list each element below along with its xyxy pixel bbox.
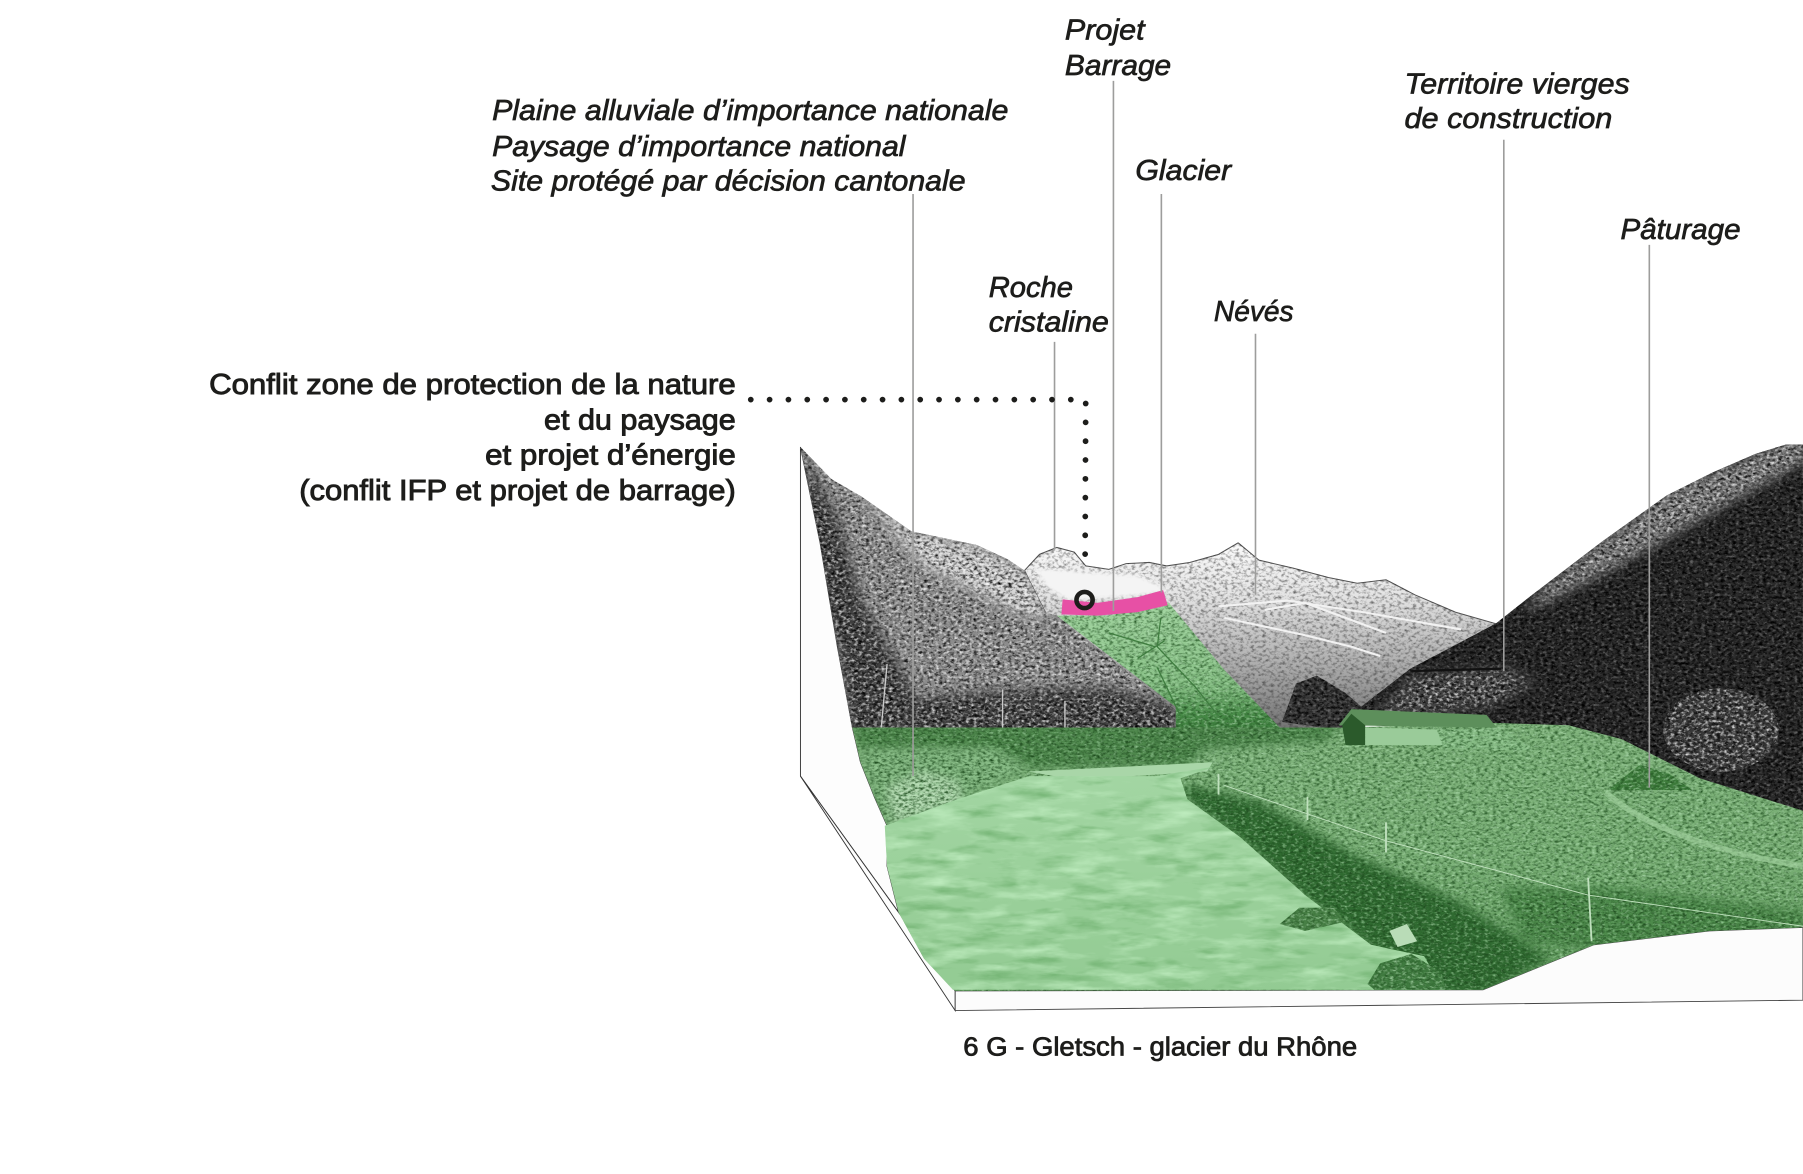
bushes foreground: [1663, 688, 1779, 772]
forested slope: [803, 456, 930, 739]
infographic: Gletsch landscape section: [210, 18, 1803, 1062]
conflict point marker: [1076, 592, 1093, 608]
label: Roche cristaline: Roche: [989, 272, 1073, 304]
grey upper ridge: [1525, 439, 1803, 612]
boulders on left bank: [887, 772, 961, 822]
label: conflict statement: (conflit IFP et projet de barrage): [299, 475, 736, 507]
fence: [1219, 774, 1803, 941]
label: protection zones: Plaine alluviale d’importance nationale: [492, 95, 1008, 127]
label: Territoire vierges de construction: de construction: [1404, 103, 1612, 135]
label: conflict statement: Conflit zone de protection de la nature: [209, 369, 736, 401]
white boulder: [1389, 924, 1417, 947]
leader: Roche cristaline: [1054, 342, 1056, 550]
label: protection zones: Site protégé par décision cantonale: [491, 166, 966, 198]
label: conflict statement: et projet d’énergie: [485, 439, 736, 471]
barn: [1339, 709, 1534, 751]
label: conflict statement: et du paysage: [544, 405, 736, 437]
label: Névés: Névés: [1214, 296, 1294, 328]
photo: distant central mountains: [1025, 543, 1496, 730]
forest foot: [901, 688, 1178, 739]
lower slope band: [1374, 668, 1536, 718]
label: Pâturage: Pâturage: [1620, 214, 1741, 246]
far dark meadow strip: [852, 723, 1340, 767]
dark rock patch: [1282, 676, 1365, 730]
right bottom grass shade: [1501, 889, 1803, 947]
label: Roche cristaline: cristaline: [989, 306, 1109, 338]
leader: Territoire vierges: [1503, 140, 1505, 671]
road: [1411, 669, 1501, 671]
label: protection zones: Paysage d’importance national: [492, 131, 907, 163]
leader: Glacier: [1160, 194, 1162, 592]
left bank pale meadow: [860, 748, 1028, 826]
mountain switchback roads: [1219, 601, 1461, 656]
pale crags: [860, 497, 1051, 618]
river rock small: [1280, 908, 1346, 931]
dark pasture mound: [1608, 765, 1692, 790]
leader: Névés: [1254, 334, 1256, 595]
green glacier zone: [1057, 603, 1282, 730]
green ground: [852, 723, 1803, 993]
label: Glacier: Glacier: [1135, 155, 1233, 187]
dark bank of grass: [1185, 785, 1548, 993]
leader: Pâturage: [1648, 245, 1650, 788]
poles: [881, 664, 1065, 728]
label: Projet Barrage: Projet: [1065, 14, 1147, 46]
snowfield: [1034, 568, 1172, 601]
pink dam project: [1061, 590, 1168, 616]
label: Territoire vierges de construction: Territoire vierges: [1404, 69, 1630, 101]
caption: 6 G - Gletsch - glacier du Rhône: [963, 1032, 1357, 1062]
leader: Projet Barrage: [1112, 81, 1114, 611]
label: Projet Barrage: Barrage: [1065, 50, 1171, 82]
pasture path: [1605, 792, 1803, 866]
river rock: [1368, 954, 1446, 990]
gravel bar: [1028, 762, 1213, 780]
photo: left mountain: [800, 447, 1178, 739]
river: [885, 767, 1444, 990]
block base sides: [800, 447, 1803, 1011]
photo: right mountain: [1339, 439, 1803, 822]
leader: Plaine alluviale: [912, 194, 914, 776]
glacier crevasses: [1109, 618, 1219, 716]
dotted conflict connector: [751, 400, 1086, 554]
